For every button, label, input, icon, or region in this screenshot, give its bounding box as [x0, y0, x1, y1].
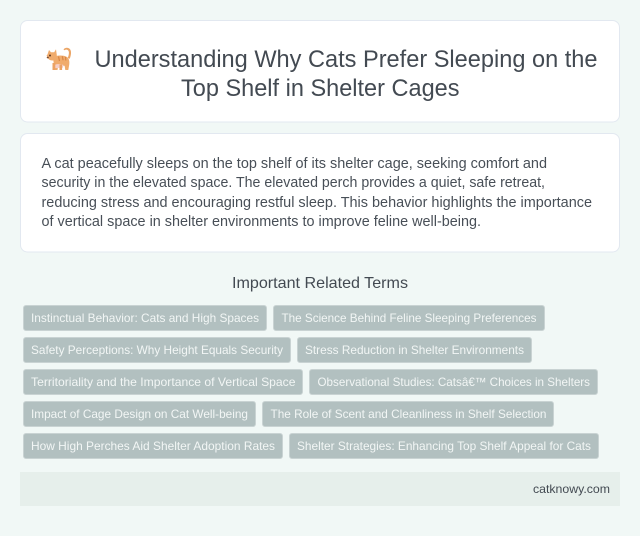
- tag: observational studies: [310, 370, 598, 394]
- text block: description: [42, 156, 592, 230]
- tag: scent and cleanliness: [262, 402, 554, 426]
- tag: observational studies: Observational Studies: Catsâ€™ Choices in Shelters: [318, 375, 590, 389]
- heading: important related terms: Important Related Terms: [232, 275, 408, 292]
- tag: high perches: How High Perches Aid Shelter Adoption Rates: [31, 439, 275, 453]
- tag: science of sleeping preferences: The Science Behind Feline Sleeping Preferences: [282, 311, 536, 325]
- text block: description: of vertical space in shelter environments to improve feline well-being.: [42, 214, 481, 230]
- title: Understanding Why Cats Prefer Sleeping on the: [94, 46, 598, 73]
- panel: title card: [20, 20, 620, 122]
- tag: stress reduction: Stress Reduction in Shelter Environments: [305, 343, 524, 357]
- tag: safety perceptions: Safety Perceptions: Why Height Equals Security: [31, 343, 283, 357]
- panel: description card: [20, 134, 620, 252]
- footer: [20, 472, 620, 506]
- tag: stress reduction: [298, 338, 532, 362]
- tag: scent and cleanliness: The Role of Scent and Cleanliness in Shelf Selection: [270, 407, 546, 421]
- tag: high perches: [24, 434, 282, 458]
- tag: safety perceptions: [24, 338, 290, 362]
- tag: territoriality: [24, 370, 302, 394]
- icon: cat: [46, 48, 71, 70]
- text block: description: A cat peacefully sleeps on the top shelf of its shelter cage, seeking comfort and: [42, 156, 547, 172]
- tag: shelter strategies: Shelter Strategies: Enhancing Top Shelf Appeal for Cats: [297, 439, 591, 453]
- text block: description: security in the elevated space. The elevated perch provides a quiet, safe retreat,: [42, 175, 545, 191]
- tag: instinctual behavior: [24, 306, 266, 330]
- tag: cage design: Impact of Cage Design on Cat Well-being: [31, 407, 248, 421]
- title: Top Shelf in Shelter Cages: [181, 75, 460, 102]
- tag: shelter strategies: [290, 434, 598, 458]
- tag: science of sleeping preferences: [274, 306, 544, 330]
- tag: instinctual behavior: Instinctual Behavior: Cats and High Spaces: [31, 311, 259, 325]
- tag: cage design: [24, 402, 256, 426]
- panel: related term tags: [24, 306, 598, 458]
- text block: description: reducing stress and encouraging restful sleep. This behavior highlights the importance: [42, 195, 592, 211]
- footer: site name: catknowy.com: [533, 482, 610, 496]
- title: [94, 46, 598, 102]
- tag: territoriality: Territoriality and the Importance of Vertical Space: [31, 375, 296, 389]
